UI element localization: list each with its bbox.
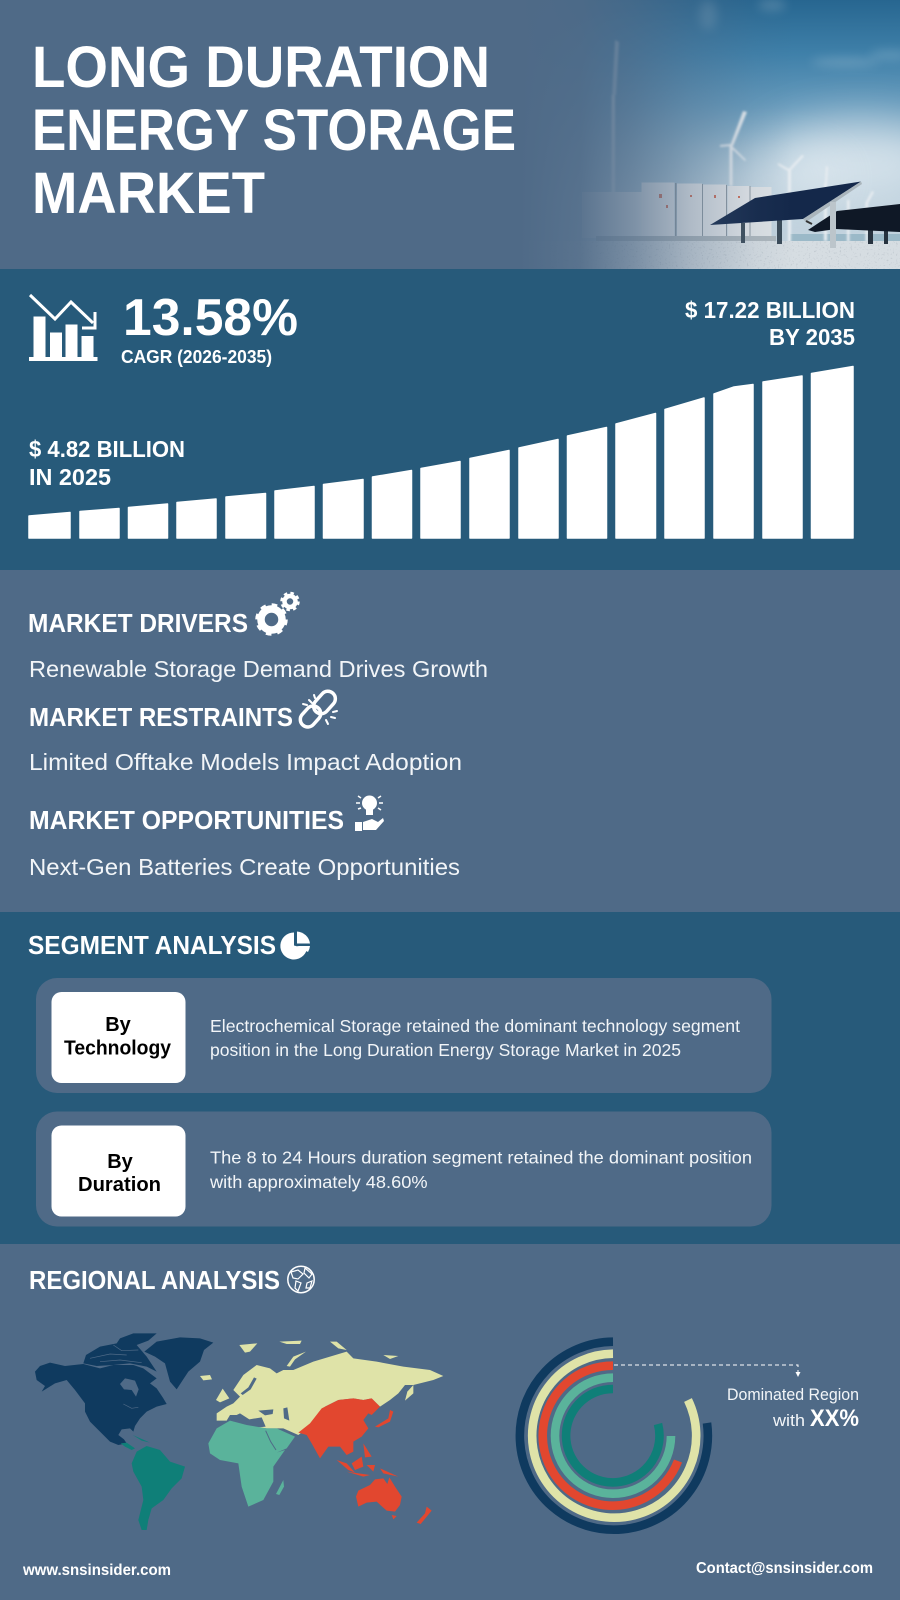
title: MARKET — [32, 161, 265, 226]
heading: market drivers: MARKET DRIVERS — [28, 610, 248, 638]
panel: header — [0, 0, 900, 269]
solar panels — [710, 182, 900, 248]
text: technology segment — [210, 1016, 740, 1060]
icon: hand holding light bulb — [355, 796, 384, 831]
photo: wind turbines, batteries and solar panels — [566, 0, 900, 269]
text: duration segment: The 8 to 24 Hours duration segment retained the dominant position — [210, 1148, 752, 1168]
text: technology segment: position in the Long Duration Energy Storage Market in 2025 — [210, 1040, 681, 1060]
heading: market opportunities: MARKET OPPORTUNITIES — [29, 807, 344, 835]
world map — [35, 1333, 443, 1530]
base value label: IN 2025 — [29, 464, 111, 490]
heading: market restraints: MARKET RESTRAINTS — [29, 704, 293, 732]
text: duration segment — [209, 1148, 752, 1192]
panel: market size and growth — [0, 269, 900, 570]
callout: dominated region — [727, 1385, 859, 1432]
CAGR label: CAGR (2026-2035) — [121, 347, 272, 367]
title — [32, 35, 516, 226]
base value label: $ 4.82 BILLION — [29, 436, 185, 462]
footer: contact: Contact@snsinsider.com — [696, 1560, 873, 1577]
bar chart: market growth — [29, 366, 853, 538]
footer: website: www.snsinsider.com — [22, 1562, 171, 1579]
forecast value label: $ 17.22 BILLION — [685, 297, 855, 323]
heading: regional analysis: REGIONAL ANALYSIS — [29, 1267, 280, 1295]
callout: dominated region: XX% — [810, 1405, 859, 1432]
label box: by duration: Duration — [78, 1174, 161, 1196]
icon: broken chain — [297, 688, 338, 730]
region: europe and north asia — [200, 1341, 443, 1435]
card: by duration — [36, 1112, 772, 1226]
icon: bar chart with trend arrow — [29, 295, 98, 361]
title: ENERGY STORAGE — [32, 98, 516, 163]
forecast value label: BY 2035 — [769, 324, 855, 350]
text: technology segment: Electrochemical Storage retained the dominant technology segment — [210, 1016, 740, 1036]
label box: by duration — [52, 1126, 186, 1216]
text: opportunity: Next-Gen Batteries Create Opportunities — [29, 854, 460, 880]
text: duration segment: with approximately 48.60% — [209, 1172, 428, 1192]
panel: market dynamics — [0, 570, 900, 912]
panel: regional analysis — [0, 1244, 900, 1600]
arrow: dashed leader to callout — [614, 1365, 800, 1377]
title: LONG DURATION — [32, 35, 490, 100]
forecast value label — [685, 297, 855, 350]
region: africa and middle east — [208, 1421, 295, 1507]
text: restraint: Limited Offtake Models Impact Adoption — [29, 749, 462, 775]
CAGR value: 13.58% — [123, 289, 298, 347]
label box: by technology: Technology — [64, 1038, 172, 1060]
label box: by duration: By — [107, 1151, 134, 1173]
label box: by technology — [52, 992, 186, 1083]
base value label — [29, 436, 185, 490]
region: asia pacific — [298, 1398, 432, 1524]
icon: pie chart — [280, 932, 310, 959]
region: south america — [121, 1435, 185, 1530]
text: driver: Renewable Storage Demand Drives Growth — [29, 656, 488, 682]
icon: globe — [288, 1266, 314, 1293]
battery cabinets — [601, 182, 776, 241]
icon: gears — [257, 593, 298, 634]
chart: concentric ring chart — [520, 1342, 708, 1530]
callout: dominated region: Dominated Region — [727, 1385, 859, 1404]
panel: segment analysis — [0, 912, 900, 1244]
callout: dominated region: with — [772, 1411, 805, 1430]
region: north america — [35, 1333, 213, 1445]
card: by technology — [36, 978, 772, 1093]
heading: segment analysis: SEGMENT ANALYSIS — [28, 932, 276, 960]
label box: by technology: By — [105, 1014, 132, 1036]
